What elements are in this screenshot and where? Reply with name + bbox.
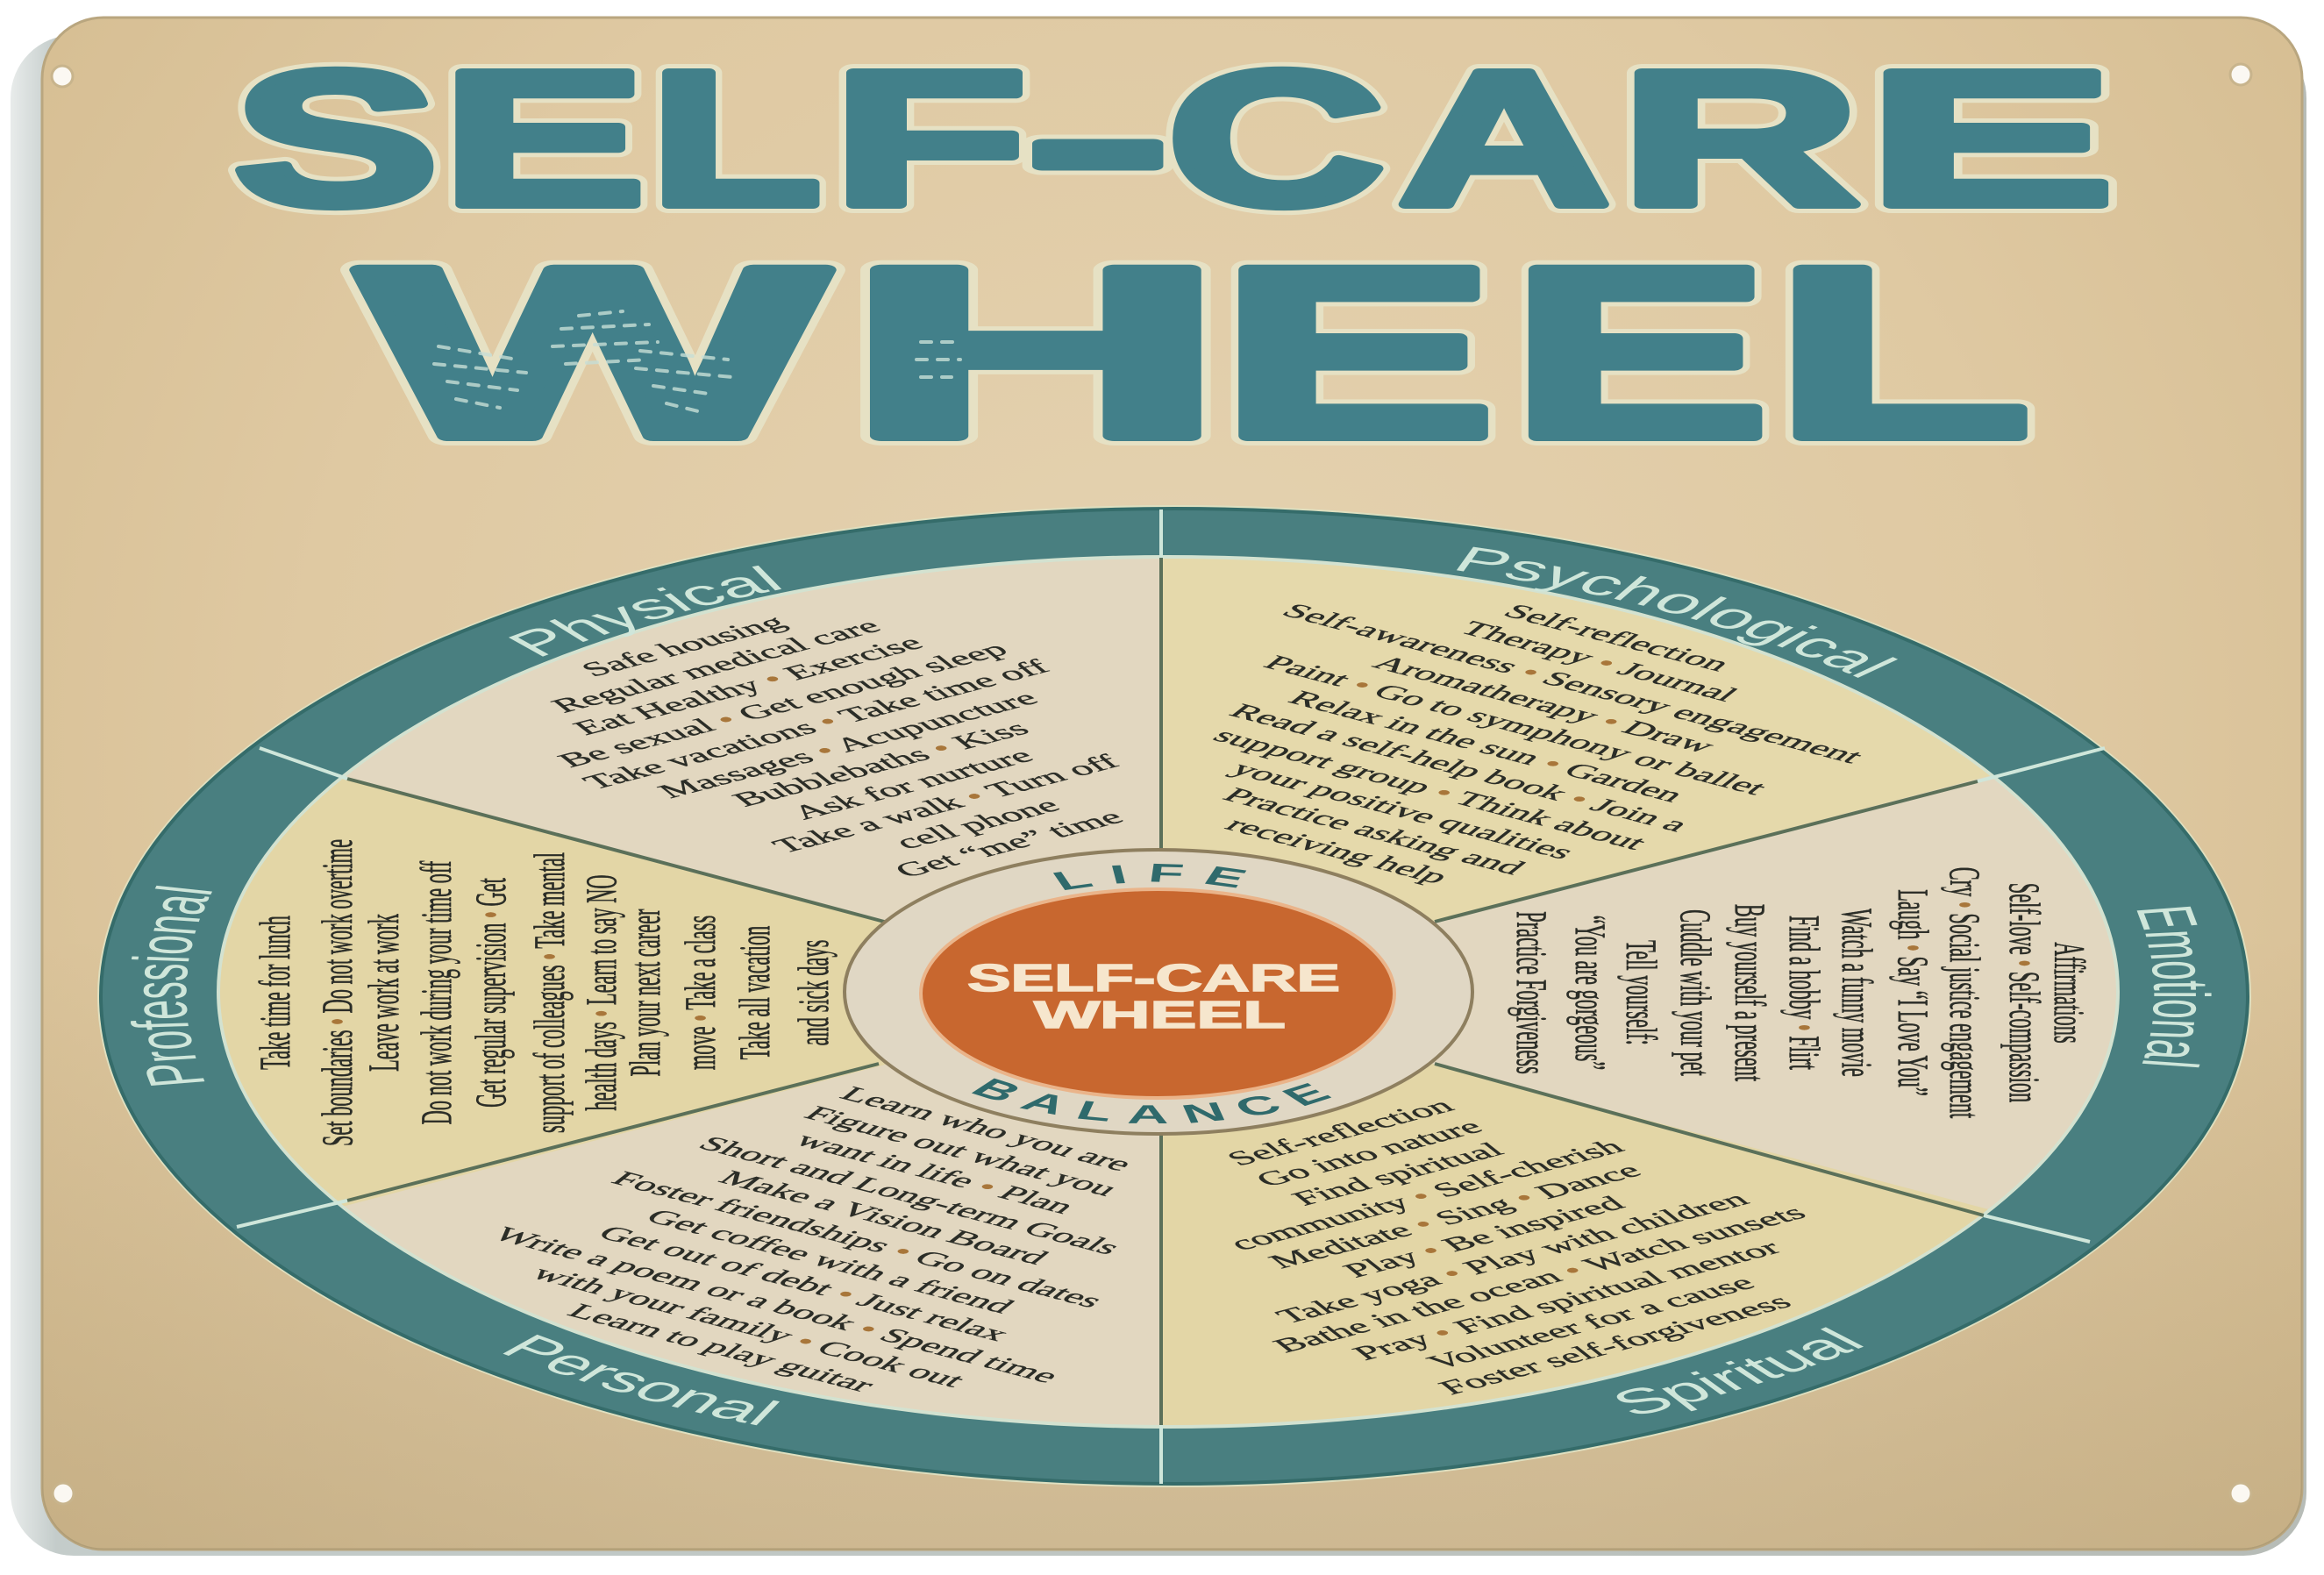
title line: SELF-CARE: E [442, 32, 645, 246]
panel: emotional list [1507, 867, 2092, 1118]
panel: professional list: Leave work at work [360, 914, 409, 1072]
panel: physical list: Take vacations • Take time off [576, 656, 1057, 794]
title line: SELF-CARE: - [1025, 32, 1171, 246]
panel: emotional list: Self-love • Self-compassion [2000, 883, 2048, 1102]
panel: spiritual list: Find spiritual [1286, 1138, 1510, 1210]
title line: SELF-CARE: F [832, 32, 1027, 246]
panel: personal list [431, 1050, 1287, 1430]
word: LIFE: LIFE [1053, 863, 1247, 890]
panel: physical list: Massages • Acupuncture [652, 688, 1045, 802]
title line: SELF-CARE: R [1620, 32, 1860, 246]
panel: spiritual list [1076, 1052, 1895, 1421]
panel: psychological list: Aromatherapy • Draw [1366, 652, 1722, 758]
panel: professional list: health days • Learn to say NO [578, 874, 626, 1111]
title line: WHEEL [360, 218, 2031, 488]
title line: WHEEL: H [846, 218, 1225, 488]
title line: WHEEL: E [1511, 218, 1769, 488]
hub title: WHEEL [1034, 994, 1286, 1037]
panel: spiritual list: community • Self-cherish [1223, 1136, 1631, 1255]
label: Psychological: Psychological [1457, 547, 1898, 678]
panel: psychological list: Therapy • Journal [1453, 617, 1744, 706]
hub title [967, 957, 1340, 1037]
hub curved words [972, 863, 1331, 1123]
panel: spiritual list: Play • Be inspired [1337, 1193, 1631, 1282]
panel: personal list: want in life • Plan [788, 1129, 1081, 1218]
panel: spiritual list: Meditate • Sing • Dance [1262, 1159, 1649, 1272]
panel: psychological list: Self-awareness • Sensory engagement [1275, 600, 1871, 767]
panel: personal list: Make a Vision Board [712, 1166, 1055, 1269]
title line: SELF-CARE: S [233, 32, 438, 246]
panel: personal list: Figure out what you [797, 1102, 1125, 1201]
panel: emotional list: Buy yourself a present [1725, 904, 1773, 1081]
outer ring band [97, 505, 2251, 1487]
label: Physical: Physical [509, 565, 782, 657]
panel: emotional list: Cuddle with your pet [1671, 909, 1719, 1076]
band labels [131, 547, 2212, 1426]
panel: spiritual list: Pray • Find spiritual mentor [1346, 1236, 1788, 1365]
panel: professional list: Do not work during your time off [413, 860, 461, 1124]
panel: emotional list: Tell yourself: [1616, 940, 1665, 1045]
panel: emotional list: Find a hobby • Flirt [1779, 916, 1828, 1070]
label: Spiritual: Spiritual [1617, 1327, 1864, 1414]
word: BALANCE: BALANCE [972, 1079, 1331, 1123]
panel: emotional list: Practice Forgiveness [1507, 911, 1555, 1074]
panel: physical list: Take a walk • Turn off [766, 751, 1126, 858]
panel: professional list: Get regular supervision • Get [467, 878, 516, 1108]
title line: SELF-CARE: A [1398, 32, 1610, 246]
panel: physical list: Get “me” time [888, 806, 1130, 882]
panel: emotional list: “You are gorgeous” [1565, 916, 1614, 1070]
panel: professional list: Set boundaries • Do not work overtime [314, 839, 362, 1146]
panel: professional list: Take all vacation [731, 926, 780, 1059]
orange center [921, 889, 1394, 1098]
sector backgrounds [220, 559, 2116, 1425]
title line: SELF-CARE: E [1867, 32, 2114, 246]
panel: psychological list: Relax in the sun • Garden [1281, 687, 1691, 807]
panel: spiritual list: Go into nature [1249, 1115, 1490, 1191]
panel: psychological list: Paint • Go to symphony or ballet [1257, 652, 1774, 799]
panel: psychological list: Read a self-help book • Join a [1223, 700, 1695, 836]
panel: spiritual list: Take yoga • Play with children [1270, 1188, 1756, 1328]
panel: spiritual list: Self-reflection [1220, 1094, 1461, 1170]
title line: SELF-CARE: E [1867, 32, 2114, 246]
panel: professional list: move • Take a class [677, 916, 725, 1070]
title line: SELF-CARE: E [442, 32, 645, 246]
panel: psychological list: Self-reflection [1496, 600, 1737, 675]
panel: personal list: with your family • Cook out [524, 1262, 973, 1392]
panel: spiritual list: Volunteer for a cause [1421, 1272, 1762, 1373]
title line: WHEEL: W [360, 218, 831, 488]
panel: physical list [468, 571, 1219, 921]
hub ring [845, 850, 1472, 1134]
panel: personal list: Learn who you are [833, 1083, 1139, 1175]
title line: WHEEL: E [1220, 218, 1495, 488]
panel: professional list: and sick days [790, 940, 838, 1045]
panel: physical list: Regular medical care [545, 615, 888, 717]
panel: personal list: Foster friendships • Go on dates [604, 1167, 1110, 1312]
panel: emotional list: Cry • Social justice engagement [1940, 867, 1988, 1118]
title line: SELF-CARE: C [1167, 32, 1385, 246]
title line: WHEEL: E [1511, 218, 1769, 488]
panel: professional list: Take time for lunch [252, 916, 300, 1070]
sector divider lines [237, 510, 2105, 1484]
panel: spiritual list: Foster self-forgiveness [1432, 1291, 1799, 1399]
panel: physical list: Safe housing [574, 611, 794, 681]
hub title: SELF-CARE [967, 957, 1340, 1000]
panel: physical list: cell phone [888, 795, 1067, 853]
title line: WHEEL: H [846, 218, 1225, 488]
title line: SELF-CARE [233, 32, 2114, 246]
title line: SELF-CARE: C [1167, 32, 1385, 246]
panel: psychological list: Practice asking and [1216, 784, 1532, 879]
label: Professional: Professional [131, 886, 212, 1086]
label: Emotional: Emotional [2136, 907, 2212, 1068]
panel: psychological list [1056, 557, 1926, 939]
center hub [843, 848, 1474, 1136]
wheel [97, 505, 2251, 1487]
title line: SELF-CARE: L [650, 32, 822, 246]
panel: physical list: Bubblebaths • Kiss [726, 717, 1037, 811]
title [233, 32, 2114, 488]
panel: psychological list: receiving help [1218, 814, 1456, 888]
title line: WHEEL: L [1774, 218, 2031, 488]
panel: emotional list: Laugh • Say “I Love You” [1888, 889, 1936, 1096]
panel: emotional list: Affirmations [2044, 942, 2092, 1044]
panel: personal list: Get coffee with a friend [638, 1205, 1021, 1317]
panel: physical list: Ask for nurture [785, 745, 1040, 824]
panel: psychological list: your positive qualities [1223, 758, 1581, 864]
title line: SELF-CARE: - [1025, 32, 1171, 246]
title line: WHEEL: L [1774, 218, 2031, 488]
title line: SELF-CARE: F [832, 32, 1027, 246]
label: Personal: Personal [503, 1335, 780, 1426]
title line: WHEEL: W [360, 218, 831, 488]
title line: SELF-CARE: S [233, 32, 438, 246]
panel: physical list: Be sexual • Get enough sleep [552, 638, 1015, 772]
panel: spiritual list: Bathe in the ocean • Watch sunsets [1266, 1201, 1814, 1357]
panel: personal list: Short and Long-term Goals [692, 1132, 1128, 1258]
panel: physical list: Eat Healthy • Exercise [567, 632, 930, 739]
panel: professional list [252, 839, 838, 1146]
panel: emotional list: Watch a funny movie [1832, 909, 1880, 1077]
title line: WHEEL: E [1220, 218, 1495, 488]
title line: SELF-CARE: L [650, 32, 822, 246]
panel: professional list: support of colleagues • Take mental [526, 852, 574, 1133]
panel: professional list: Plan your next career [622, 909, 670, 1076]
panel: personal list: Get out of debt • Just relax [591, 1222, 1016, 1345]
sector text lists [252, 557, 2092, 1430]
panel: personal list: Write a poem or a book • Spend time [486, 1223, 1066, 1387]
panel: psychological list: support group • Think about [1206, 724, 1654, 854]
title line: SELF-CARE: A [1398, 32, 1610, 246]
title line: SELF-CARE: R [1620, 32, 1860, 246]
panel: personal list: Learn to play guitar [560, 1300, 882, 1396]
